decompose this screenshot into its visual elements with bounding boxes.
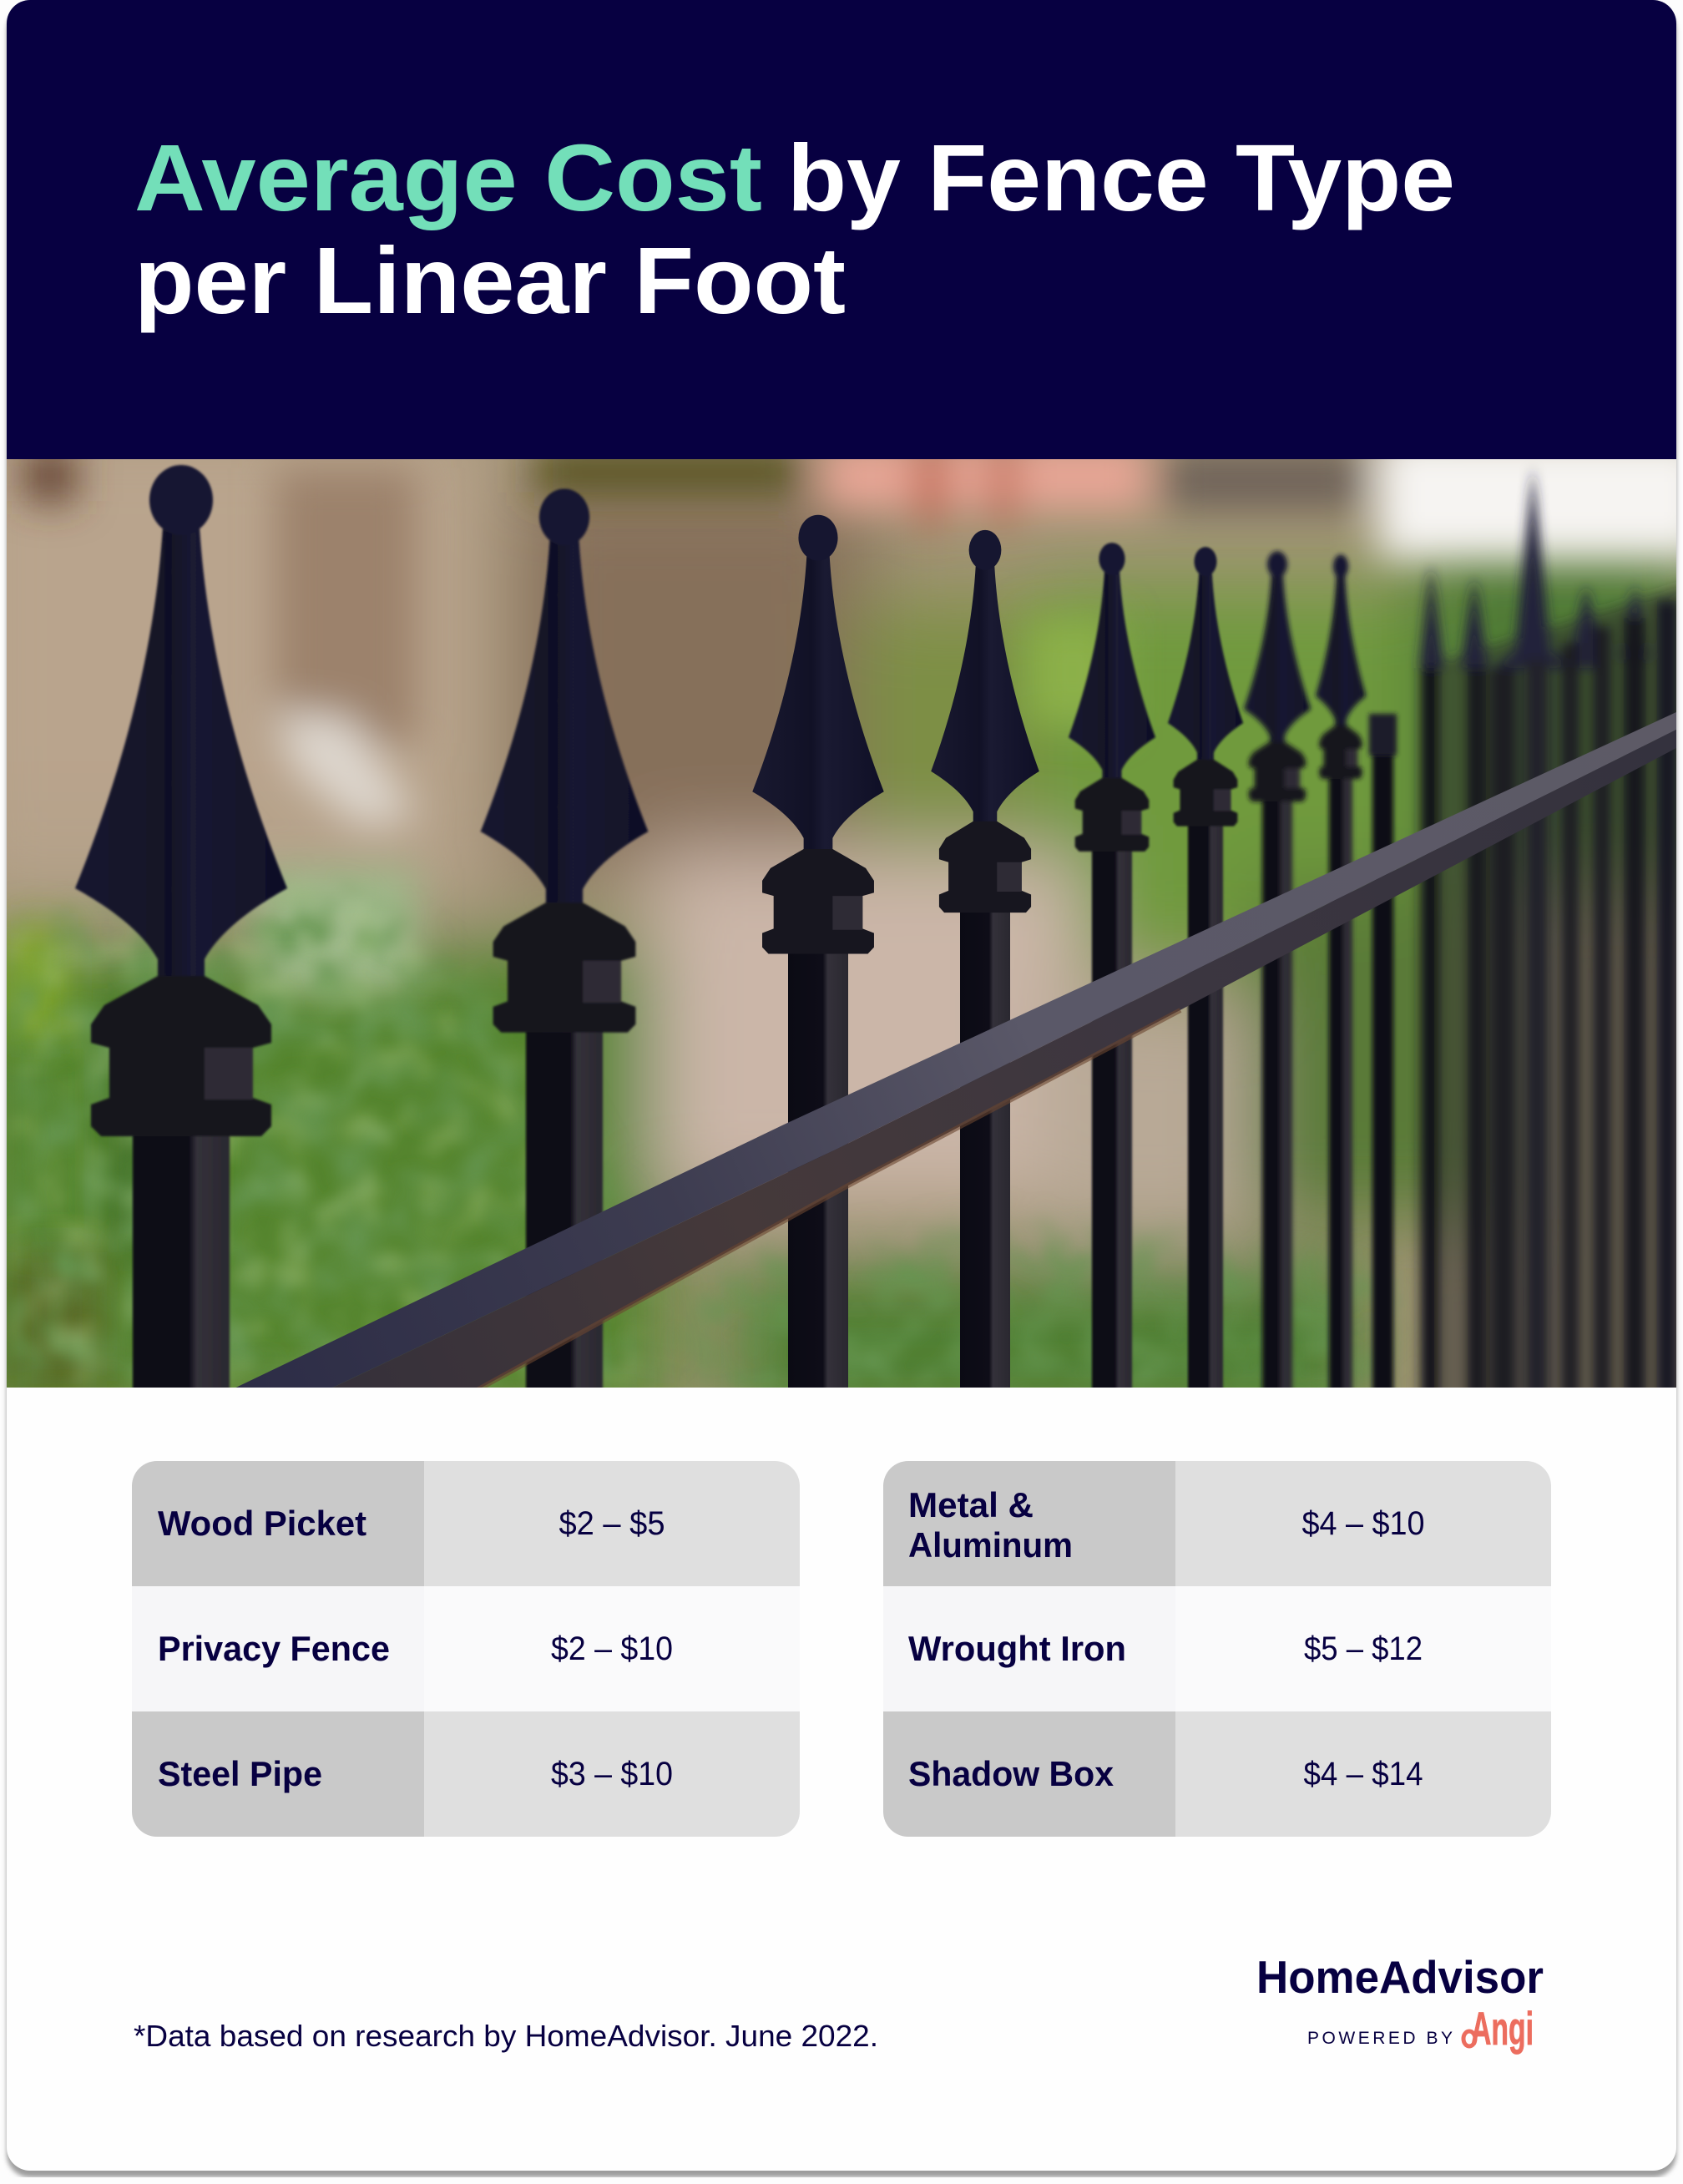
logo: HomeAdvisor powered by Angi: HomeAdvisor <box>1256 1951 1544 2003</box>
horizontal rail <box>225 712 1676 1393</box>
row: wood picket: $2 – $5 <box>559 1505 665 1542</box>
row: wrought iron <box>908 1629 1423 1668</box>
fence post 7 <box>1244 551 1311 1403</box>
left price table <box>132 1461 800 1837</box>
fence post 6 <box>1168 547 1243 1403</box>
row: shadow box: Shadow Box <box>908 1754 1114 1793</box>
fence post 9 <box>1369 714 1397 1403</box>
row: steel pipe: $3 – $10 <box>551 1756 673 1792</box>
row: shadow box <box>908 1754 1423 1793</box>
row: steel pipe: Steel Pipe <box>158 1754 322 1793</box>
row: privacy fence <box>158 1629 673 1668</box>
title: Average Cost <box>134 125 762 230</box>
row: privacy fence: $2 – $10 <box>551 1630 673 1667</box>
photo background: blurred garden <box>0 417 1683 1436</box>
title <box>134 125 1455 333</box>
fence post 3 <box>752 515 884 1403</box>
title: by Fence Type <box>787 125 1455 230</box>
fence post 5 <box>1069 543 1155 1403</box>
logo: HomeAdvisor powered by Angi <box>1256 1951 1544 2055</box>
footnote: *Data based on research by HomeAdvisor. June 2022. <box>134 2019 878 2053</box>
row: wrought iron: $5 – $12 <box>1304 1630 1423 1667</box>
row: metal and aluminum <box>908 1485 1424 1565</box>
row: steel pipe <box>158 1754 673 1793</box>
row: shadow box: $4 – $14 <box>1304 1756 1423 1792</box>
row: wrought iron: Wrought Iron <box>908 1629 1126 1668</box>
row: metal and aluminum: $4 – $10 <box>1302 1505 1424 1542</box>
row: metal and aluminum: Metal & <box>908 1485 1034 1524</box>
row: wood picket: Wood Picket <box>158 1504 366 1543</box>
fence post 4 <box>931 530 1039 1403</box>
row: wood picket <box>158 1504 665 1543</box>
far fence posts, out of focus <box>1419 467 1683 1403</box>
row: privacy fence: Privacy Fence <box>158 1629 390 1668</box>
row: metal and aluminum: Aluminum <box>908 1525 1073 1565</box>
header banner <box>7 0 1676 460</box>
right price table <box>883 1461 1551 1837</box>
fence post 2 <box>481 488 648 1403</box>
fence post 8 <box>1316 554 1366 1403</box>
logo: HomeAdvisor powered by Angi: POWERED BY <box>1307 2029 1453 2048</box>
photo: wrought iron fence <box>0 417 1683 1436</box>
logo: HomeAdvisor powered by Angi: Angi <box>1471 2002 1534 2055</box>
fence post 1 <box>75 465 287 1403</box>
title: per Linear Foot <box>134 228 846 333</box>
